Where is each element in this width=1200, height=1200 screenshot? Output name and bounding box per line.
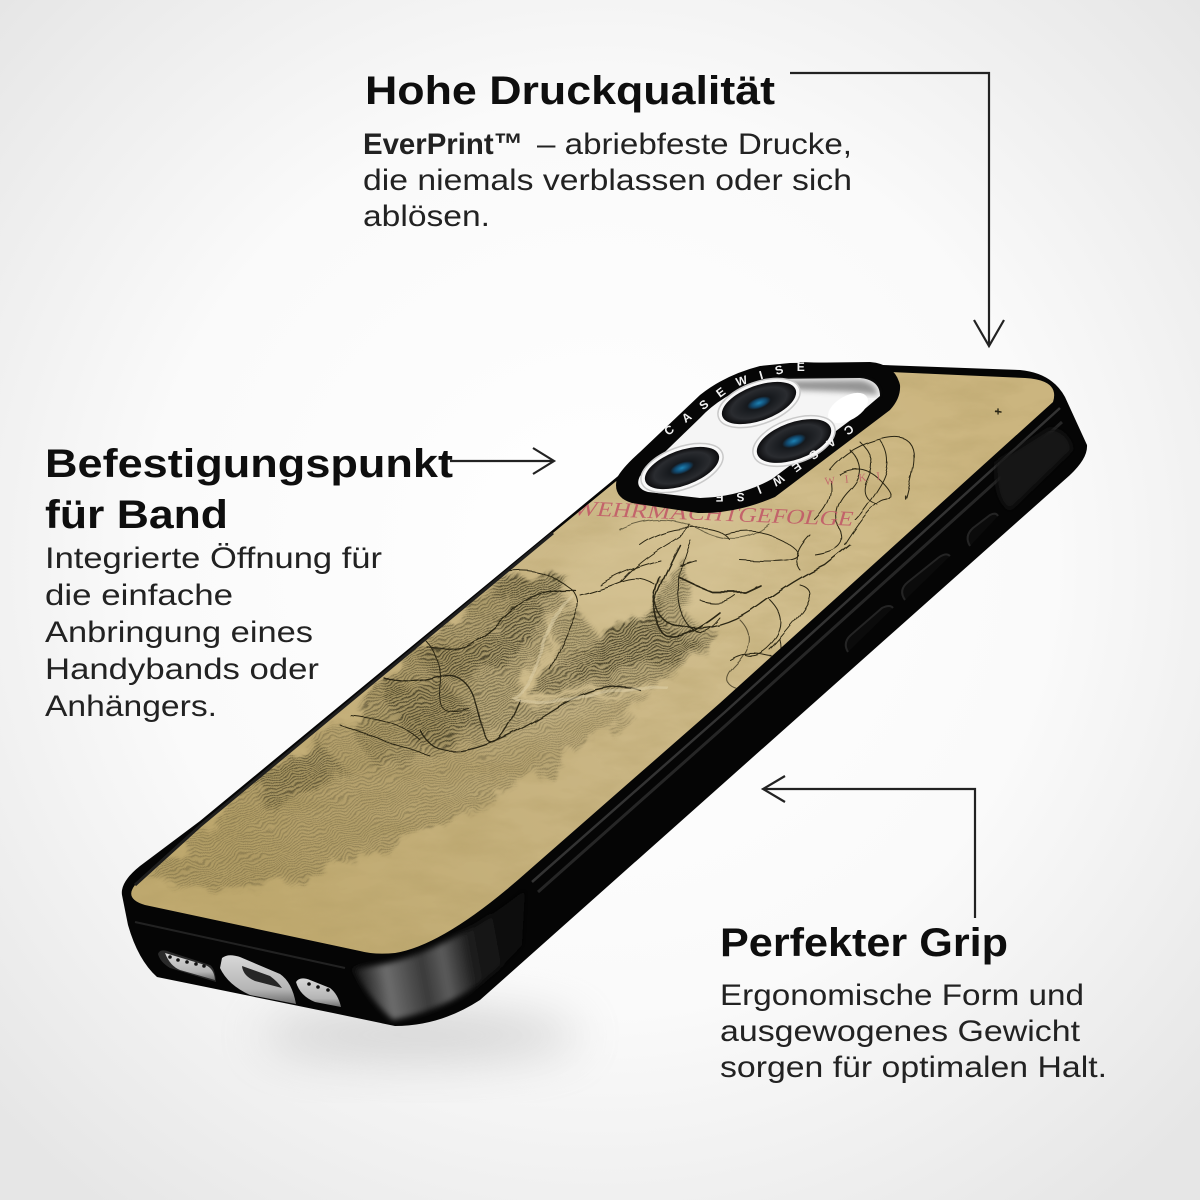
bump branding upper: CASEWISE [664,362,804,434]
glossy corner highlight [352,890,525,1020]
callout: Perfekter Grip [720,921,1107,1084]
callout: Befestigungspunkt für Band [45,442,453,723]
callout: Hohe Druckqualität [363,69,852,233]
right speaker grille [296,978,341,1007]
bump window [638,378,880,498]
body text: Handybands oder [45,653,319,686]
lens: right [746,406,842,476]
phone in black case [122,362,1088,1026]
heading: Hohe Druckqualität [365,69,775,113]
body text: Ergonomische Form und [720,979,1084,1012]
heading: für Band [45,493,228,537]
body text: sorgen für optimalen Halt. [720,1051,1107,1084]
lens: top [711,369,807,437]
small red letters: WIKI [824,469,891,488]
lens: left [634,434,730,502]
sketch: pale ridge [513,595,668,702]
body text: EverPrint™ [363,128,523,161]
arrow: to print surface [790,73,1004,346]
body text: die einfache [45,579,233,612]
body text: Integrierte Öffnung für [45,542,382,575]
left speaker grille [158,950,216,982]
body text [720,979,1107,1084]
printed red title: WEHRMACHTGEFOLGE [571,496,857,531]
bump ring [616,362,900,513]
printed back: vintage paper with sketch [131,372,1054,954]
charging port [220,955,296,1004]
body text: Anhängers. [45,690,217,723]
arrow: to strap attachment [450,448,554,474]
body text: ausgewogenes Gewicht [720,1015,1081,1048]
bottom edge line [135,922,345,968]
body text [363,128,852,233]
heading [45,442,453,537]
camera bump [616,362,900,513]
thin edge around print [135,533,553,885]
arrow: to phone side grip [763,776,975,918]
sketch: hatched drapery [148,556,719,895]
body text [45,542,382,723]
side rails [532,408,1062,892]
side switch recess [996,428,1072,510]
sketch: ink lines of figure and hair [340,409,1001,756]
body text: – abriebfeste Drucke, [537,128,852,161]
body text: die niemals verblassen oder sich [363,164,852,197]
case body [122,362,1087,1026]
body text: Anbringung eines [45,616,313,649]
phone shadow [260,1009,580,1061]
window inner shadow [775,380,878,395]
bump branding lower: CASEWISE [716,426,853,502]
heading: Perfekter Grip [720,921,1008,965]
body text: ablösen. [363,200,490,233]
side buttons [846,514,998,652]
heading: Befestigungspunkt [45,442,453,486]
